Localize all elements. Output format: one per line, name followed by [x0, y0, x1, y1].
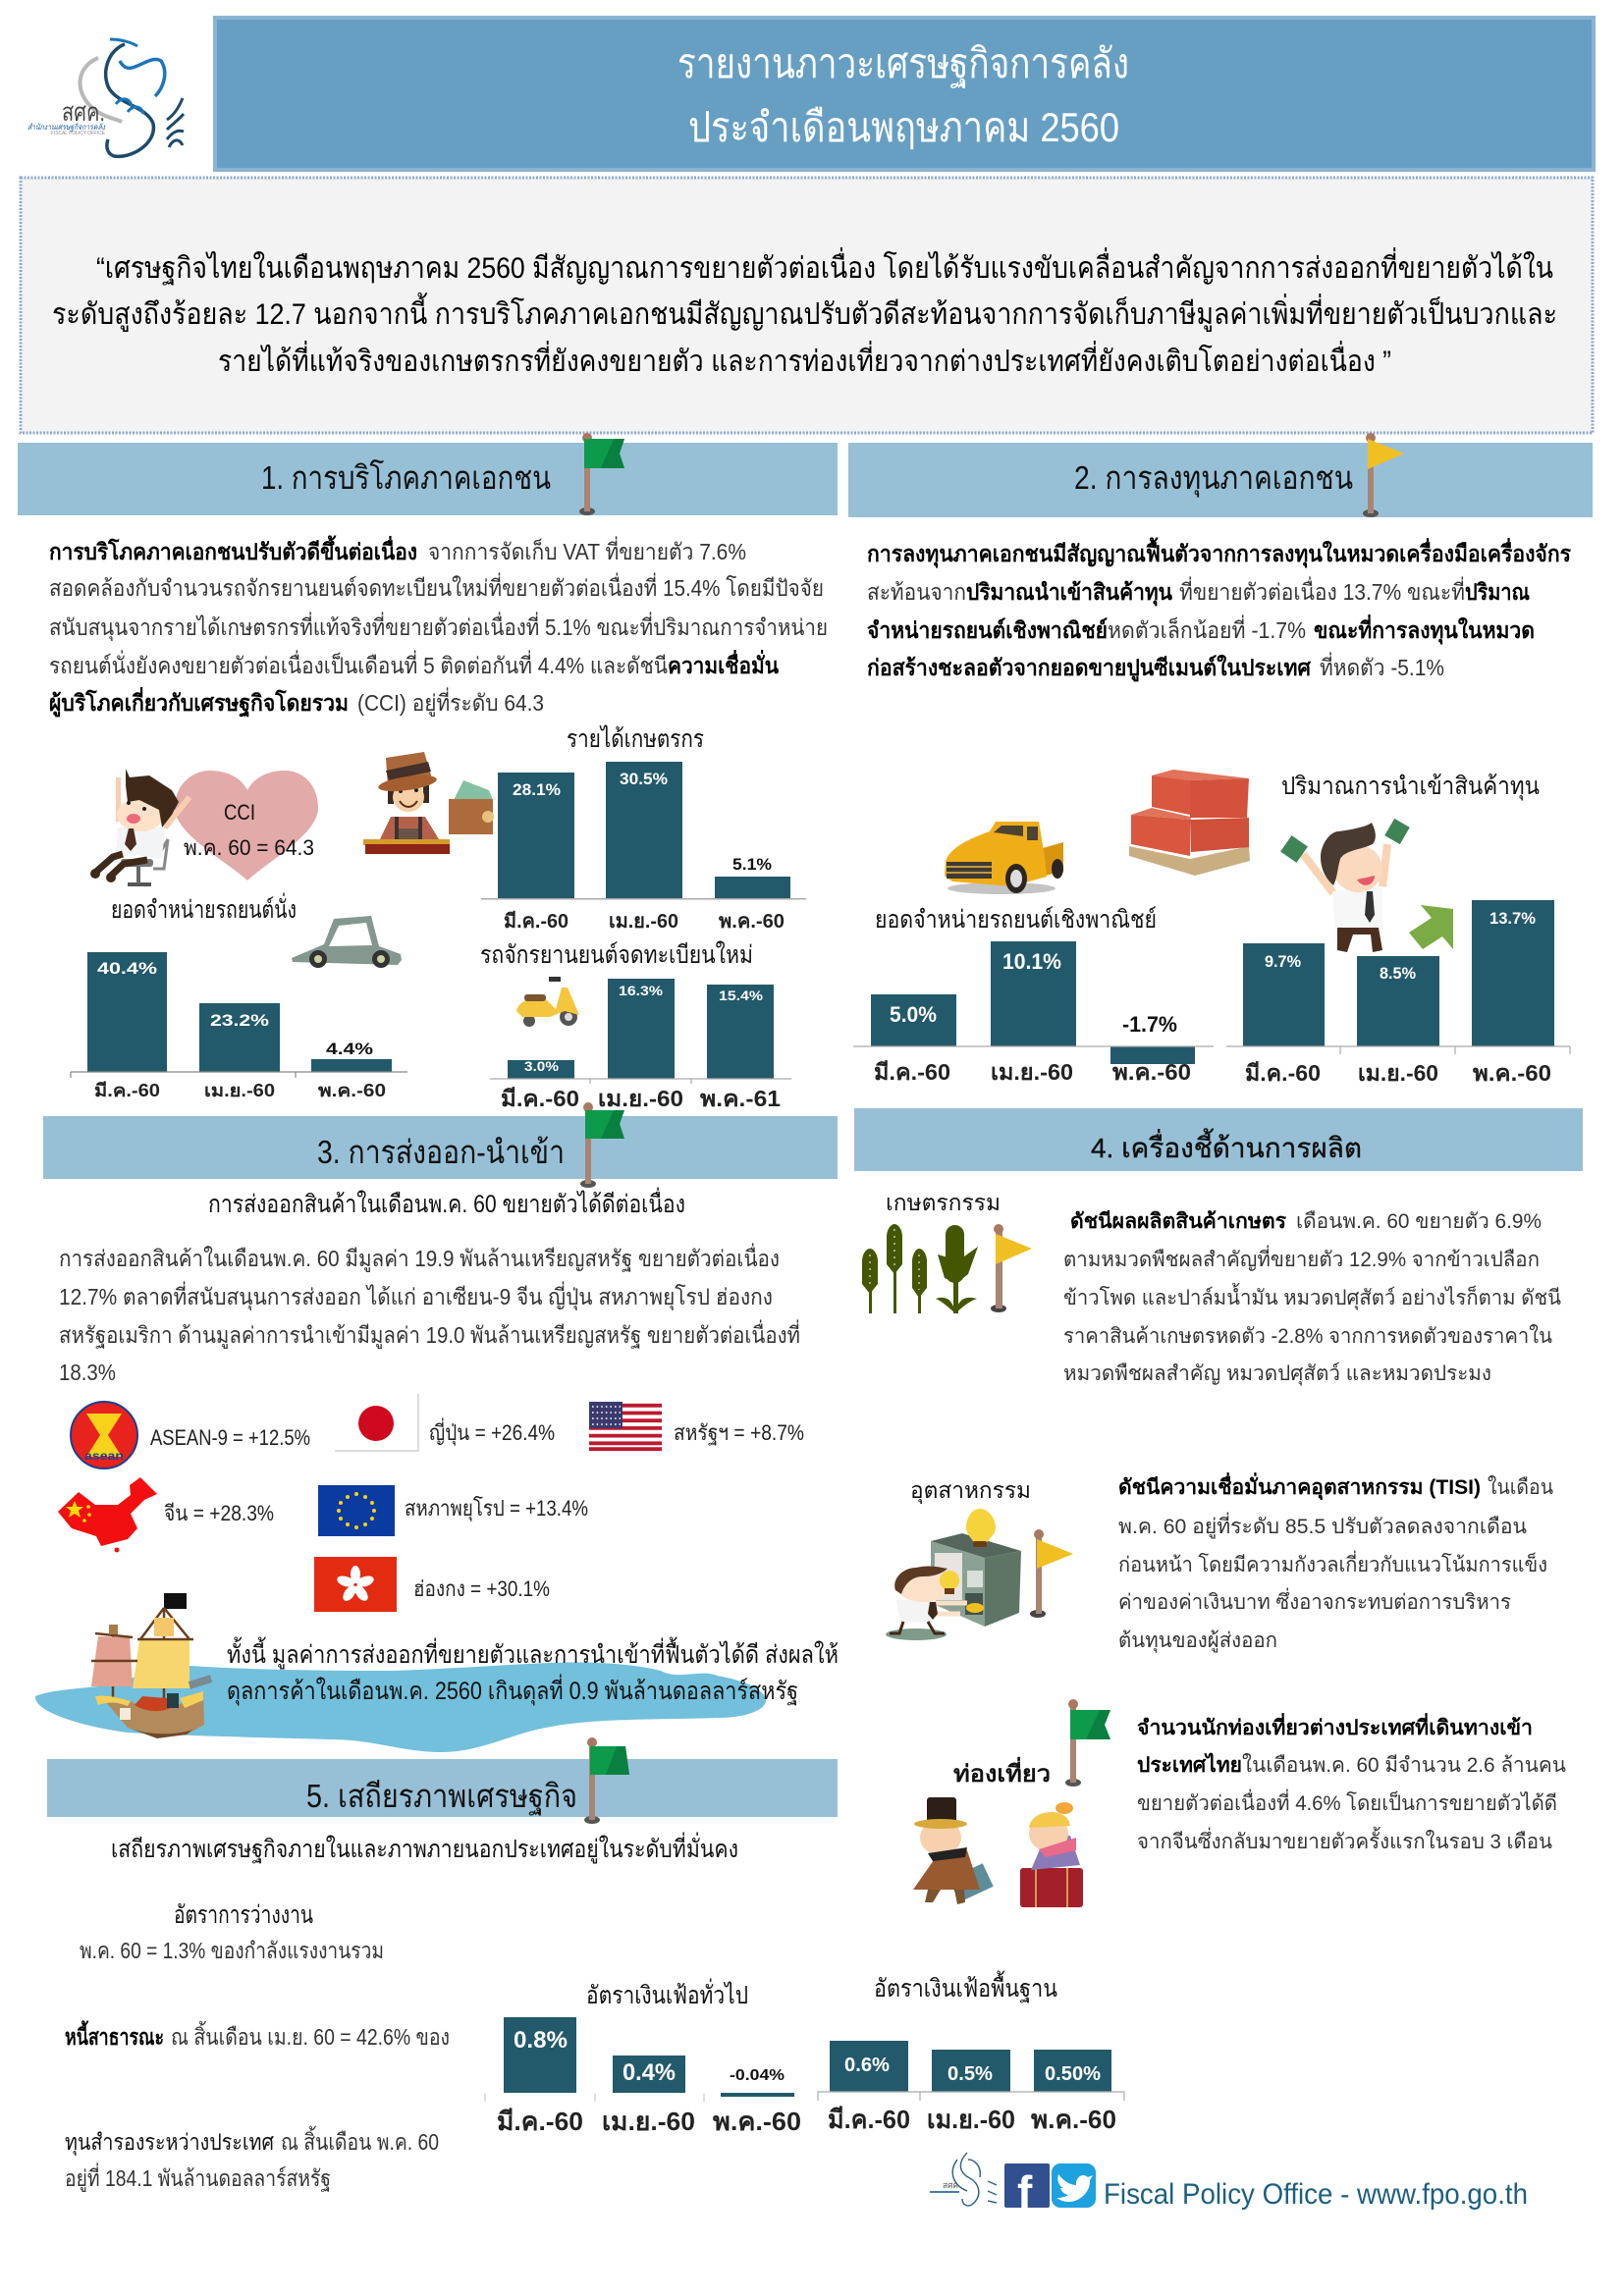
text: tourism body: ในเดือนพ.ค. 60 มีจำนวน 2.6 ล้านคน	[1242, 1753, 1566, 1777]
label: EU: สหภาพยุโรป = +13.4%	[405, 1496, 588, 1522]
panel: section 2 private investment	[848, 433, 1593, 1086]
chart: farm income: พ.ค.-60	[719, 911, 785, 933]
icon: happy man with money	[1280, 819, 1410, 952]
label: China: จีน = +28.3%	[164, 1501, 274, 1525]
chart: core inflation: 0.6%	[844, 2055, 890, 2076]
text: agriculture body: ดัชนีผลผลิตสินค้าเกษตร	[1070, 1209, 1287, 1233]
icon: small logo	[930, 2153, 997, 2206]
icon: facebook: f	[1017, 2166, 1033, 2217]
text: investment body	[867, 537, 1572, 682]
icon: EU flag	[318, 1485, 395, 1536]
icon: red boxes on pallet	[1129, 770, 1250, 876]
text: exports body	[59, 1243, 800, 1385]
text: agriculture body	[1063, 1209, 1561, 1386]
chart: new motorcycle registrations: 3.0%	[524, 1058, 560, 1074]
chart: headline inflation: พ.ค.-60	[713, 2107, 801, 2136]
icon: farmer with wallet	[363, 752, 494, 854]
title banner: ประจำเดือนพฤษภาคม 2560	[688, 104, 1119, 150]
icon: cheering man on chair	[90, 769, 189, 886]
title banner: รายงานภาวะเศรษฐกิจการคลัง	[677, 40, 1129, 88]
chart: capital goods imports: มี.ค.-60	[1245, 1060, 1321, 1086]
text: reserves: ทุนสำรองระหว่างประเทศ	[65, 2129, 274, 2156]
text: industry body: ดัชนีความเชื่อมั่นภาคอุตสาหกรรม (TISI)	[1118, 1471, 1481, 1501]
icon: traveler girl on suitcase	[1020, 1802, 1083, 1907]
text: investment body: ที่ขยายตัวต่อเนื่อง 13.7% ขณะที่	[1179, 576, 1465, 605]
text: trade balance: ทั้งนี้ มูลค่าการส่งออกที่ขยายตัวและการนำเข้าที่ฟื้นตัวได้ดี ส่งผลให้	[227, 1636, 839, 1670]
text: reserves: ณ สิ้นเดือน พ.ค. 60	[281, 2126, 439, 2155]
text: consumption body: สอดคล้องกับจำนวนรถจักรยานยนต์จดทะเบียนใหม่ที่ขยายตัวต่อเนื่องที่ 15.4% โดยมีปัจจัย	[49, 572, 824, 601]
panel: section 5 economic stability	[47, 1737, 1124, 2192]
chart: capital goods imports: 13.7%	[1489, 909, 1536, 928]
text: investment body: ที่หดตัว -5.1%	[1320, 652, 1444, 680]
text: investment body: หดตัวเล็กน้อยที่ -1.7%	[1108, 614, 1306, 643]
text: tourism body: ขยายตัวต่อเนื่องที่ 4.6% โดยเป็นการขยายตัวได้ดี	[1137, 1789, 1557, 1815]
text: tourism body: จากจีนซึ่งกลับมาขยายตัวครั้งแรกในรอบ 3 เดือน	[1137, 1827, 1552, 1853]
text: agriculture body: ข้าวโพด และปาล์มน้ำมัน หมวดปศุสัตว์ อย่างไรก็ตาม ดัชนี	[1063, 1283, 1561, 1310]
chart: core inflation: เม.ย.-60	[927, 2105, 1015, 2134]
text: industry body: พ.ค. 60 อยู่ที่ระดับ 85.5 ปรับตัวลดลงจากเดือน	[1118, 1512, 1527, 1539]
text: tourism body: ประเทศไทย	[1137, 1752, 1242, 1777]
chart: new motorcycle registrations: 16.3%	[619, 983, 664, 998]
icon: yellow flag 2	[1363, 433, 1404, 517]
label: tourism: ท่องเที่ยว	[953, 1756, 1051, 1788]
icon: green up arrow	[1409, 905, 1453, 949]
chart: new motorcycle registrations: พ.ค.-61	[700, 1086, 781, 1111]
chart: capital goods imports: พ.ค.-60	[1473, 1060, 1551, 1086]
icon: yellow flag industry	[1030, 1529, 1073, 1618]
icon: green flag 3	[580, 1102, 624, 1188]
panel: section 3 exports and imports	[35, 1102, 839, 1752]
chart: farm income	[481, 724, 806, 933]
chart: core inflation	[818, 1970, 1124, 2134]
label: ASEAN-9: ASEAN-9 = +12.5%	[150, 1425, 310, 1450]
text: unemployment: อัตราการว่างงาน	[174, 1901, 313, 1929]
icon: green flag tourism	[1065, 1699, 1110, 1787]
text: exports body: สหรัฐอเมริกา ด้านมูลค่าการนำเข้ามีมูลค่า 19.0 พันล้านเหรียญสหรัฐ ขยายตัวต่อเนื่องที่	[59, 1319, 800, 1349]
icon: yellow scooter	[516, 977, 579, 1027]
text: exports body: การส่งออกสินค้าในเดือนพ.ค. 60 มีมูลค่า 19.9 พันล้านเหรียญสหรัฐ ขยายตัวต่อเนื่อง	[59, 1243, 780, 1272]
chart: capital goods imports: 8.5%	[1380, 964, 1416, 983]
text: industry body: ในเดือน	[1488, 1475, 1553, 1499]
icon: US flag	[589, 1402, 662, 1451]
chart: capital goods imports	[1226, 773, 1570, 1086]
text: trade balance: ดุลการค้าในเดือนพ.ค. 2560 เกินดุลที่ 0.9 พันล้านดอลลาร์สหรัฐ	[227, 1674, 798, 1706]
chart: commercial car sales	[853, 906, 1214, 1085]
chart: core inflation: มี.ค.-60	[828, 2105, 910, 2134]
icon: water	[35, 1662, 766, 1752]
icon: yellow pickup truck	[945, 822, 1063, 894]
label: Japan: ญี่ปุ่น = +26.4%	[429, 1417, 555, 1446]
heading: section 3	[43, 1116, 838, 1179]
text: unemployment	[80, 1901, 384, 1963]
icon: crops	[862, 1224, 978, 1313]
chart: headline inflation	[485, 1978, 801, 2136]
chart: farm income: มี.ค.-60	[504, 910, 568, 933]
chart: passenger car sales: ยอดจำหน่ายรถยนต์นั่ง	[111, 892, 297, 924]
panel: section 1 private consumption	[18, 433, 838, 1111]
heading: section 2: 2. การลงทุนภาคเอกชน	[1074, 459, 1353, 498]
chart: new motorcycle registrations: เม.ย.-60	[598, 1086, 683, 1111]
chart: core inflation: พ.ค.-60	[1031, 2105, 1116, 2134]
heading: section 3: 3. การส่งออก-นำเข้า	[317, 1134, 565, 1170]
chart: passenger car sales: 23.2%	[210, 1011, 269, 1030]
icon: CCI heart: พ.ค. 60 = 64.3	[184, 835, 314, 860]
heading: section 1	[18, 443, 838, 515]
icon: CCI heart: CCI	[224, 800, 255, 825]
chart: capital goods imports: เม.ย.-60	[1358, 1060, 1438, 1086]
chart: commercial car sales: เม.ย.-60	[991, 1059, 1073, 1085]
heading: section 4	[854, 1108, 1583, 1171]
label: Hong Kong: ฮ่องกง = +30.1%	[413, 1576, 550, 1601]
text: industry body: ต้นทุนของผู้ส่งออก	[1118, 1629, 1277, 1653]
icon: ASEAN emblem	[71, 1402, 137, 1468]
text: unemployment: พ.ค. 60 = 1.3% ของกำลังแรงงานรวม	[80, 1938, 384, 1963]
text: reserves: อยู่ที่ 184.1 พันล้านดอลลาร์สหรัฐ	[65, 2163, 331, 2192]
text: consumption body: (CCI) อยู่ที่ระดับ 64.3	[357, 687, 544, 717]
chart: commercial car sales: ยอดจำหน่ายรถยนต์เชิงพาณิชย์	[875, 906, 1157, 934]
chart: farm income: 28.1%	[513, 780, 561, 799]
text: consumption body: รถยนต์นั่งยังคงขยายตัวต่อเนื่องเป็นเดือนที่ 5 ติดต่อกันที่ 4.4% และดัชนี	[49, 650, 668, 678]
chart: headline inflation: เม.ย.-60	[602, 2107, 695, 2136]
text: tourism body	[1137, 1712, 1566, 1853]
chart: core inflation: อัตราเงินเฟ้อพื้นฐาน	[874, 1970, 1057, 2002]
chart: passenger car sales: เม.ย.-60	[204, 1081, 275, 1100]
text: public debt	[65, 2020, 450, 2050]
text: investment body: สะท้อนจาก	[867, 579, 966, 605]
logo: Fiscal Policy Office: สศค.	[62, 97, 105, 127]
text: industry body: ก่อนหน้า โดยมีความกังวลเกี่ยวกับแนวโน้มการแข็ง	[1118, 1550, 1547, 1576]
text: agriculture body: ราคาสินค้าเกษตรหดตัว -2.8% จากการหดตัวของราคาใน	[1063, 1324, 1552, 1348]
chart: passenger car sales: 4.4%	[326, 1040, 373, 1058]
text: public debt: ณ สิ้นเดือน เม.ย. 60 = 42.6% ของ	[171, 2021, 450, 2050]
chart: new motorcycle registrations: มี.ค.-60	[501, 1086, 579, 1111]
icon: small logo: สศค	[943, 2180, 958, 2190]
quote panel: รายได้ที่แท้จริงของเกษตรกรที่ยังคงขยายตัว และการท่องเที่ยวจากต่างประเทศที่ยังคงเติบโตอย่างต่อเนื่อง ”	[218, 341, 1391, 378]
text: agriculture body: ตามหมวดพืชผลสำคัญที่ขยายตัว 12.9% จากข้าวเปลือก	[1063, 1245, 1540, 1271]
icon: man at machine	[886, 1509, 1021, 1640]
text: industry body: ค่าของค่าเงินบาท ซึ่งอาจกระทบต่อการบริหาร	[1118, 1587, 1511, 1614]
text: public debt: หนี้สาธารณะ	[65, 2020, 164, 2050]
chart: farm income: รายได้เกษตรกร	[567, 724, 704, 753]
heading: section 1: 1. การบริโภคภาคเอกชน	[261, 459, 551, 496]
chart: commercial car sales: -1.7%	[1122, 1012, 1177, 1037]
chart: farm income: เม.ย.-60	[609, 911, 678, 933]
footer: logo, social icons and website	[930, 2153, 1528, 2217]
heading: section 5	[47, 1759, 838, 1817]
chart: passenger car sales	[71, 892, 407, 1100]
chart: headline inflation: -0.04%	[730, 2067, 785, 2084]
chart: commercial car sales: 5.0%	[890, 1002, 937, 1027]
icon: Hong Kong flag	[314, 1557, 397, 1612]
chart: headline inflation: มี.ค.-60	[497, 2107, 583, 2136]
chart: new motorcycle registrations	[480, 940, 791, 1111]
text: investment body: ขณะที่การลงทุนในหมวด	[1314, 614, 1535, 645]
text: consumption body: สนับสนุนจากรายได้เกษตรกรที่แท้จริงที่ขยายตัวต่อเนื่องที่ 5.1% ขณะที่ปริมาณการจำหน่าย	[49, 612, 828, 641]
chart: core inflation: 0.5%	[947, 2063, 993, 2085]
chart: headline inflation: 0.4%	[623, 2059, 676, 2086]
text: exports body: 18.3%	[59, 1360, 116, 1385]
text: agriculture body: หมวดพืชผลสำคัญ หมวดปศุสัตว์ และหมวดประมง	[1063, 1362, 1491, 1386]
text: website: Fiscal Policy Office - www.fpo.go.th	[1104, 2178, 1528, 2211]
heading: section 4: 4. เครื่องชี้ด้านการผลิต	[1091, 1128, 1362, 1163]
chart: passenger car sales: 40.4%	[97, 959, 157, 978]
chart: capital goods imports: 9.7%	[1265, 952, 1301, 971]
panel: section 4 production indicators	[854, 1108, 1583, 1907]
text: investment body: ก่อสร้างชะลอตัวจากยอดขายปูนซีเมนต์ในประเทศ	[867, 654, 1311, 682]
chart: headline inflation: 0.8%	[514, 2027, 568, 2054]
text: reserves	[65, 2126, 439, 2192]
icon: China map	[58, 1477, 157, 1553]
text: investment body: จำหน่ายรถยนต์เชิงพาณิชย์	[867, 617, 1108, 643]
label: USA: สหรัฐฯ = +8.7%	[674, 1420, 804, 1446]
text: exports body: 12.7% ตลาดที่สนับสนุนการส่งออก ได้แก่ อาเซียน-9 จีน ญี่ปุ่น สหภาพยุโรป ฮ่องกง	[59, 1281, 773, 1310]
chart: passenger car sales: พ.ค.-60	[318, 1081, 386, 1100]
icon: green flag 1	[579, 433, 624, 515]
text: investment body: ปริมาณนำเข้าสินค้าทุน	[966, 579, 1172, 607]
text: consumption body	[49, 535, 828, 718]
icon: grey car	[292, 916, 402, 968]
text: tourism body: จำนวนนักท่องเที่ยวต่างประเทศที่เดินทางเข้า	[1137, 1712, 1533, 1739]
chart: commercial car sales: พ.ค.-60	[1112, 1059, 1191, 1085]
chart: farm income: 5.1%	[732, 855, 772, 874]
icon: ASEAN emblem: asean	[84, 1449, 124, 1463]
icon: CCI heart	[175, 771, 318, 881]
icon: yellow flag agriculture	[991, 1224, 1032, 1312]
heading: section 2	[848, 443, 1593, 517]
icon: pirate ship	[91, 1593, 211, 1738]
icon: Japan flag	[335, 1394, 418, 1451]
text: industry body	[1118, 1471, 1553, 1653]
icon: twitter	[1052, 2163, 1096, 2208]
chart: passenger car sales: มี.ค.-60	[94, 1081, 160, 1100]
heading: section 5: 5. เสถียรภาพเศรษฐกิจ	[306, 1778, 577, 1816]
icon: green flag 5	[584, 1737, 629, 1824]
label: industry: อุตสาหกรรม	[910, 1477, 1031, 1504]
text: agriculture body: เดือนพ.ค. 60 ขยายตัว 6.9%	[1296, 1210, 1542, 1233]
logo: Fiscal Policy Office: FISCAL POLICY OFFICE	[51, 131, 106, 136]
logo: Fiscal Policy Office: สำนักงานเศรษฐกิจการคลัง	[27, 123, 106, 133]
text: trade balance	[227, 1636, 839, 1706]
chart: commercial car sales: มี.ค.-60	[874, 1059, 950, 1085]
text: consumption body: การบริโภคภาคเอกชนปรับตัวดีขึ้นต่อเนื่อง	[49, 535, 417, 564]
quote panel	[21, 178, 1593, 433]
chart: new motorcycle registrations: 15.4%	[719, 988, 764, 1003]
icon: facebook	[1004, 2163, 1050, 2217]
icon: traveler man	[913, 1797, 994, 1904]
chart: headline inflation: อัตราเงินเฟ้อทั่วไป	[586, 1978, 748, 2009]
chart: farm income: 30.5%	[620, 770, 668, 788]
chart: capital goods imports: ปริมาณการนำเข้าสินค้าทุน	[1281, 773, 1540, 801]
title banner	[215, 18, 1594, 170]
label: agriculture: เกษตรกรรม	[886, 1190, 1001, 1215]
subheading: stability: เสถียรภาพเศรษฐกิจภายในและภาพภายนอกประเทศอยู่ในระดับที่มั่นคง	[111, 1832, 738, 1864]
subheading: exports: การส่งออกสินค้าในเดือนพ.ค. 60 ขยายตัวได้ดีต่อเนื่อง	[208, 1187, 685, 1218]
chart: core inflation: 0.50%	[1045, 2063, 1101, 2085]
chart: new motorcycle registrations: รถจักรยานยนต์จดทะเบียนใหม่	[480, 940, 753, 969]
text: consumption body: จากการจัดเก็บ VAT ที่ขยายตัว 7.6%	[428, 536, 746, 564]
logo: Fiscal Policy Office	[27, 39, 184, 156]
text: investment body: ปริมาณ	[1465, 579, 1530, 605]
chart: commercial car sales: 10.1%	[1002, 949, 1061, 974]
text: investment body: การลงทุนภาคเอกชนมีสัญญาณฟื้นตัวจากการลงทุนในหมวดเครื่องมือเครื่องจักร	[867, 537, 1572, 568]
text: consumption body: ความเชื่อมั่น	[668, 649, 779, 678]
text: consumption body: ผู้บริโภคเกี่ยวกับเศรษฐกิจโดยรวม	[49, 686, 349, 718]
